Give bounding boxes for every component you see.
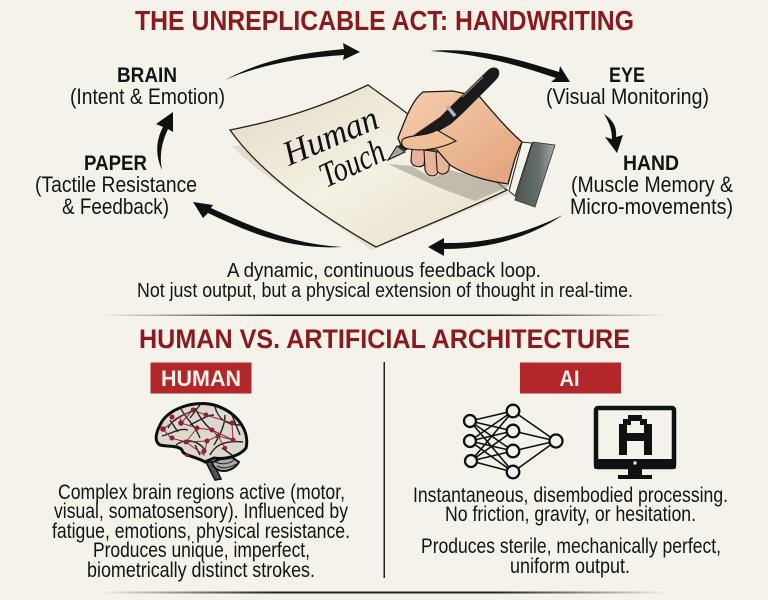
label: brain [70, 64, 225, 109]
icon: monitor with pixel A [594, 408, 676, 479]
heading: human vs artificial: HUMAN VS. ARTIFICIAL ARCHITECTURE [139, 324, 630, 354]
text: human description: fatigue, emotions, physical resistance. [52, 520, 350, 543]
label: hand [570, 152, 733, 219]
caption: Not just output, but a physical extension of thought in real-time. [137, 280, 633, 302]
label: brain: (Intent & Emotion) [70, 84, 225, 109]
text: human description [52, 481, 350, 582]
sleeve [515, 142, 555, 207]
label: eye [546, 64, 709, 109]
arrow: top right to eye [430, 50, 570, 82]
arrow: eye to hand [604, 114, 623, 153]
badge: human [150, 362, 252, 394]
label: hand: (Muscle Memory & [571, 172, 733, 197]
illustration: hand writing on paper [230, 67, 555, 250]
badge: AI [520, 362, 621, 394]
paper [230, 85, 510, 250]
arrow: paper bottom to paper label [193, 202, 342, 247]
arrow: hand to paper bottom [428, 215, 563, 256]
text: human description: visual, somatosensory). Influenced by [54, 500, 348, 523]
hand [398, 91, 522, 184]
text: AI description: uniform output. [510, 555, 630, 578]
shirt cuff [509, 142, 532, 196]
fingers [411, 148, 450, 176]
title: THE UNREPLICABLE ACT: HANDWRITING [135, 5, 634, 36]
text: AI description [413, 484, 728, 578]
caption [137, 260, 633, 302]
badge: AI: AI [560, 366, 580, 391]
arrow: brain to eye (top left) [225, 43, 360, 80]
caption: A dynamic, continuous feedback loop. [227, 260, 541, 282]
paper shadow under hand [388, 164, 510, 201]
thumb [402, 130, 456, 150]
label: paper: PAPER [84, 152, 147, 175]
pen [388, 67, 499, 160]
label: brain: BRAIN [117, 64, 177, 87]
arrow: paper to brain [156, 112, 173, 170]
handwriting: Human Touch: Human [276, 98, 384, 174]
label: paper: & Feedback) [62, 194, 169, 219]
icon: brain with network [156, 404, 247, 480]
text: human description: Produces unique, imperfect, [93, 539, 310, 562]
label: hand: Micro-movements) [570, 194, 733, 219]
label: paper: (Tactile Resistance [35, 172, 197, 197]
handwriting: Human Touch: Touch [313, 131, 391, 195]
label: eye: EYE [609, 64, 645, 87]
badge: human: HUMAN [161, 366, 241, 391]
text: human description: Complex brain regions active (motor, [58, 481, 345, 504]
label: eye: (Visual Monitoring) [546, 84, 709, 109]
label: hand: HAND [623, 152, 679, 175]
text: AI description: No friction, gravity, or hesitation. [445, 503, 696, 526]
label: paper [35, 152, 197, 219]
icon: neural network [464, 405, 562, 478]
text: human description: biometrically distinct strokes. [87, 559, 315, 582]
